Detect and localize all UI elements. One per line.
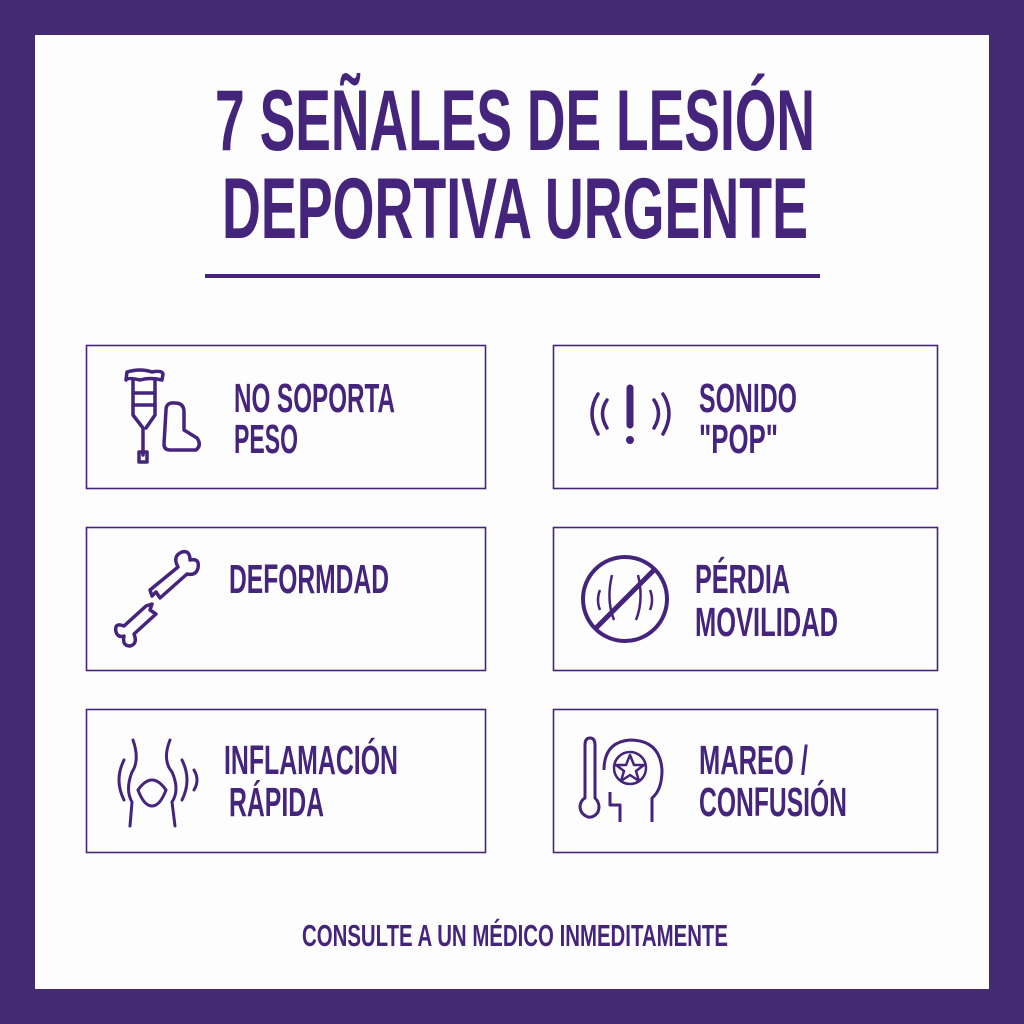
panel: no soporta peso: PESO [234,416,298,462]
icon: broken bone [116,552,198,646]
icon: crutch and foot [126,370,199,462]
title [215,73,815,257]
panel: sonido pop: "POP" [699,416,778,462]
panel: perdida movilidad [554,528,938,670]
panel: inflamacion rapida [86,710,486,852]
icon: thermometer and head [580,738,662,822]
footer: CONSULTE A UN MÉDICO INMEDITAMENTE [302,918,728,953]
panel: mareo confusion [554,710,938,852]
panel: sonido pop [554,346,938,488]
panel: inflamacion rapida: INFLAMACIÓN [224,737,398,783]
panel: deformidad: DEFORMDAD [229,556,389,602]
panel: mareo confusion: MAREO / [699,737,808,783]
panel: deformidad [86,528,486,670]
panel: sonido pop: SONIDO [699,375,797,421]
panel: no soporta peso: NO SOPORTA [234,375,395,421]
panel: no soporta peso [86,346,486,488]
panel: inflamacion rapida: RÁPIDA [229,779,324,825]
panel: perdida movilidad: PÉRDIA [695,556,790,602]
icon: alert sound [592,388,669,444]
icon: no movement [583,557,667,641]
icon: swollen knee [119,740,197,826]
panel: mareo confusion: CONFUSIÓN [699,779,847,825]
panel: perdida movilidad: MOVILIDAD [695,599,838,645]
